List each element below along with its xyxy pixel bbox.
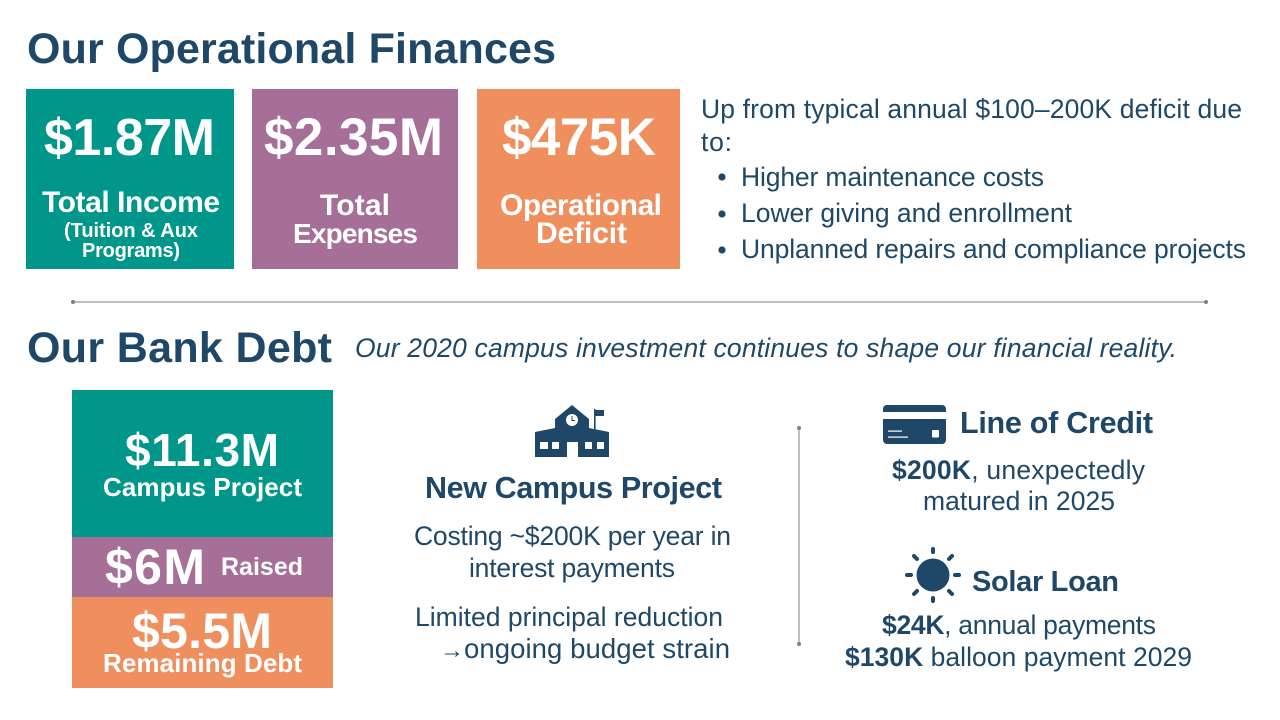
title: operational finances: Our Operational Finances [27, 25, 556, 73]
panel: total expenses: Expenses [293, 218, 418, 249]
stacked bar: remaining debt [72, 597, 333, 688]
subheading: campus investment: Our 2020 campus investment continues to shape our financial reality. [355, 333, 1177, 363]
text block: new campus project: New Campus Project [425, 471, 722, 505]
panel: operational deficit [477, 89, 680, 269]
panel: operational deficit: $475K [502, 108, 656, 167]
panel: total expenses: $2.35M [264, 108, 443, 167]
stacked bar: remaining debt: Remaining Debt [103, 648, 302, 678]
text block: solar loan: $24K, annual payments [882, 610, 1156, 640]
icon: school building [535, 405, 609, 457]
stacked bar: raised: Raised [221, 553, 303, 581]
text block: new campus project: Costing ~$200K per year in [414, 521, 731, 551]
panel: total expenses [252, 89, 458, 269]
panel: operational deficit: Operational [500, 189, 662, 222]
text block: deficit explanation [701, 94, 1246, 264]
stacked bar: raised [72, 537, 333, 597]
stacked bar: campus project: $11.3M [125, 424, 279, 476]
text block: line of credit [892, 406, 1153, 516]
text block: line of credit: matured in 2025 [923, 486, 1115, 516]
panel: total income: Total Income [42, 186, 220, 219]
stacked bar: remaining debt: $5.5M [132, 603, 272, 659]
panel: operational deficit: Deficit [536, 217, 627, 250]
panel: total income: $1.87M [44, 109, 215, 167]
panel: total income: (Tuition & Aux [64, 220, 198, 242]
icon: credit card [883, 405, 946, 444]
icon: sun [907, 549, 959, 601]
stacked bar: raised: $6M [105, 539, 205, 595]
stacked bar: campus project [72, 390, 333, 537]
text block: deficit explanation: Unplanned repairs and compliance projects [741, 234, 1246, 264]
text block: deficit explanation: to: [701, 127, 732, 157]
stacked bar: campus project: Campus Project [103, 472, 302, 502]
text block: solar loan: Solar Loan [972, 566, 1119, 598]
text block: new campus project: Limited principal reduction [415, 602, 723, 632]
panel: total income: Programs) [82, 240, 180, 262]
text block: new campus project [414, 471, 731, 664]
text block: deficit explanation: Higher maintenance costs [741, 162, 1044, 192]
heading: bank debt: Our Bank Debt [27, 324, 332, 372]
panel: total expenses: Total [320, 189, 390, 222]
text block: deficit explanation: Up from typical annual $100–200K deficit due [701, 94, 1242, 124]
text block: new campus project: → [440, 637, 464, 664]
text block: new campus project: interest payments [469, 553, 675, 583]
text block: solar loan [845, 566, 1192, 672]
text block: line of credit: $200K, unexpectedly [892, 455, 1146, 485]
panel: total income [26, 89, 234, 269]
text block: solar loan: $130K balloon payment 2029 [845, 642, 1192, 672]
text block: new campus project: ongoing budget strain [464, 633, 730, 664]
text block: deficit explanation: Lower giving and enrollment [741, 198, 1073, 228]
text block: line of credit: Line of Credit [960, 406, 1153, 440]
